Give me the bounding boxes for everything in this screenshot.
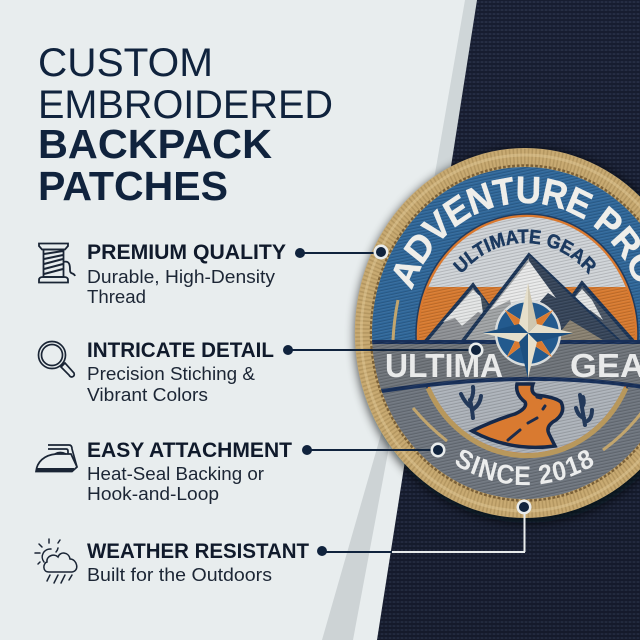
- navy fabric background: [377, 0, 640, 640]
- heading: INTRICATE DETAIL: [87, 339, 274, 362]
- since text: SINCE 2018: [456, 450, 594, 486]
- feature: easy attachment: [36, 439, 446, 504]
- gold lower inner ring: [428, 388, 626, 456]
- road: [472, 384, 563, 447]
- grey diagonal stripe bottom: [322, 340, 409, 640]
- title: EMBROIDERED: [38, 83, 333, 127]
- description: Durable, High-Density: [87, 267, 275, 287]
- gold accents: [393, 300, 640, 450]
- description: Hook-and-Loop: [87, 484, 219, 504]
- connector: [302, 442, 446, 458]
- embroidered patch: [347, 145, 640, 527]
- right shrub: [576, 395, 592, 425]
- patch field: [372, 167, 640, 499]
- heading: EASY ATTACHMENT: [87, 439, 292, 462]
- feature: weather resistant: [35, 500, 532, 585]
- right mountain: [572, 280, 634, 340]
- feature: intricate detail: [38, 339, 484, 405]
- connector: [317, 500, 532, 556]
- icon: sun cloud rain: [35, 539, 77, 583]
- ultimate gear arc text: ULTIMATE GEAR: [452, 229, 596, 275]
- icon: iron: [36, 445, 77, 472]
- feature: premium quality: [39, 241, 388, 307]
- heading: PREMIUM QUALITY: [87, 241, 286, 264]
- description: Heat-Seal Backing or: [87, 464, 264, 484]
- road dashes: [508, 397, 545, 440]
- orange ring: [416, 214, 638, 456]
- central scene: [419, 217, 635, 453]
- description: Thread: [87, 287, 146, 307]
- heading: WEATHER RESISTANT: [87, 540, 309, 563]
- title: CUSTOM: [38, 41, 213, 85]
- left shrub: [461, 387, 481, 418]
- description: [87, 464, 264, 504]
- grey diagonal stripe top: [420, 0, 480, 260]
- icon: magnifying glass: [38, 342, 74, 377]
- icon: thread spool: [39, 244, 75, 282]
- left mountain: [424, 282, 490, 340]
- connector: [295, 244, 388, 260]
- title: PATCHES: [38, 163, 228, 209]
- description: [87, 267, 275, 307]
- title: [38, 41, 333, 209]
- center mountain: [462, 255, 620, 342]
- gold border: [355, 148, 640, 518]
- description: [87, 364, 255, 405]
- description: Built for the Outdoors: [87, 565, 272, 585]
- connector: [283, 342, 484, 358]
- description: Precision Stiching &: [87, 364, 255, 384]
- patch shadow: [355, 149, 640, 523]
- banner: [365, 342, 640, 392]
- description: Vibrant Colors: [87, 385, 208, 405]
- title: BACKPACK: [38, 121, 272, 167]
- banner text left: ULTIMA: [385, 347, 503, 384]
- compass rose: [483, 283, 573, 378]
